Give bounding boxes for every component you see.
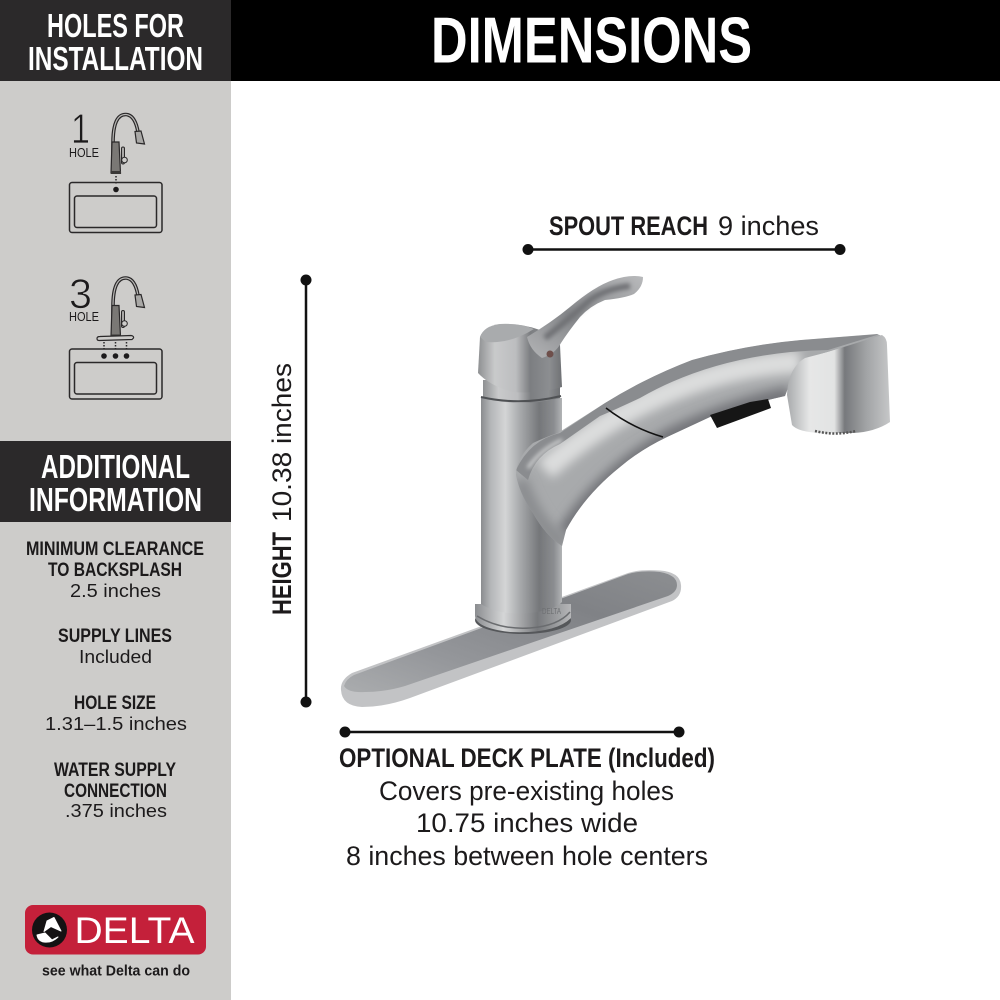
- info: hole size: HOLE SIZE: [74, 693, 156, 714]
- spout seam: [606, 408, 663, 437]
- dimension: deck plate: 10.75 inches wide: [416, 808, 638, 838]
- info: water supply connection: .375 inches: [65, 801, 167, 821]
- cap top: [480, 324, 534, 342]
- sidebar background: [0, 0, 231, 1000]
- icon: one hole installation: [69, 105, 162, 232]
- dimension: deck plate: [339, 726, 715, 871]
- header: holes for installation: HOLES FOR: [47, 7, 184, 44]
- header: additional information: [0, 441, 231, 522]
- dimension: height: 10.38 inches: [267, 363, 297, 522]
- info: water supply connection: [54, 760, 176, 821]
- delta mark: DELTA: [542, 607, 562, 616]
- header: additional information: INFORMATION: [29, 481, 202, 518]
- cap: [478, 324, 562, 392]
- header: holes for installation: [0, 0, 231, 81]
- info: minimum clearance: TO BACKSPLASH: [48, 560, 182, 581]
- icon: three hole installation: HOLE: [69, 309, 99, 324]
- logo: delta: see what Delta can do: [42, 964, 190, 980]
- collar: [481, 380, 561, 403]
- dimension: deck plate: OPTIONAL DECK PLATE (Included): [339, 743, 715, 773]
- dimension: spout reach: SPOUT REACH: [549, 211, 708, 241]
- icon: three hole installation: 3: [69, 270, 92, 317]
- info: hole size: [45, 693, 187, 734]
- icon: one hole installation: HOLE: [69, 145, 99, 160]
- logo: delta: [25, 905, 206, 980]
- spout highlight: [545, 362, 800, 470]
- joint highlight: [528, 440, 562, 468]
- dimension: spout reach: [522, 211, 846, 255]
- dimension: deck plate: Covers pre-existing holes: [379, 776, 674, 806]
- info: water supply connection: WATER SUPPLY: [54, 760, 176, 781]
- dimension: spout reach: 9 inches: [718, 211, 819, 241]
- handle screw: [546, 350, 554, 358]
- info: minimum clearance: 2.5 inches: [70, 581, 161, 601]
- title: dimensions: DIMENSIONS: [431, 4, 752, 76]
- info: water supply connection: CONNECTION: [64, 781, 167, 802]
- image: faucet: [341, 276, 890, 707]
- deck plate: [341, 570, 681, 707]
- info: minimum clearance: [26, 539, 204, 601]
- icon: three hole installation: [69, 270, 162, 399]
- header: holes for installation: INSTALLATION: [28, 40, 203, 77]
- spout top band: [516, 334, 880, 480]
- dimension: deck plate: 8 inches between hole centers: [346, 841, 708, 871]
- title: dimensions: [231, 0, 1000, 81]
- spray head: [787, 335, 890, 433]
- trigger: [710, 399, 771, 428]
- info: supply lines: [58, 626, 172, 667]
- base ring: [475, 604, 571, 634]
- info: hole size: 1.31–1.5 inches: [45, 714, 187, 734]
- spout lower shade: [566, 396, 790, 535]
- info: minimum clearance: MINIMUM CLEARANCE: [26, 539, 204, 560]
- logo: delta: DELTA: [74, 910, 195, 951]
- icon: one hole installation: 1: [71, 105, 90, 152]
- header: additional information: ADDITIONAL: [41, 448, 190, 485]
- spout joint shade: [520, 480, 565, 545]
- info: supply lines: Included: [79, 647, 152, 667]
- dimension: height: HEIGHT: [267, 532, 297, 615]
- column: [481, 398, 562, 614]
- info: supply lines: SUPPLY LINES: [58, 626, 172, 647]
- spray nozzle: [815, 431, 856, 434]
- handle highlight: [545, 286, 630, 338]
- spout: [510, 330, 890, 550]
- dimension: height: [267, 274, 312, 708]
- handle: [527, 276, 643, 358]
